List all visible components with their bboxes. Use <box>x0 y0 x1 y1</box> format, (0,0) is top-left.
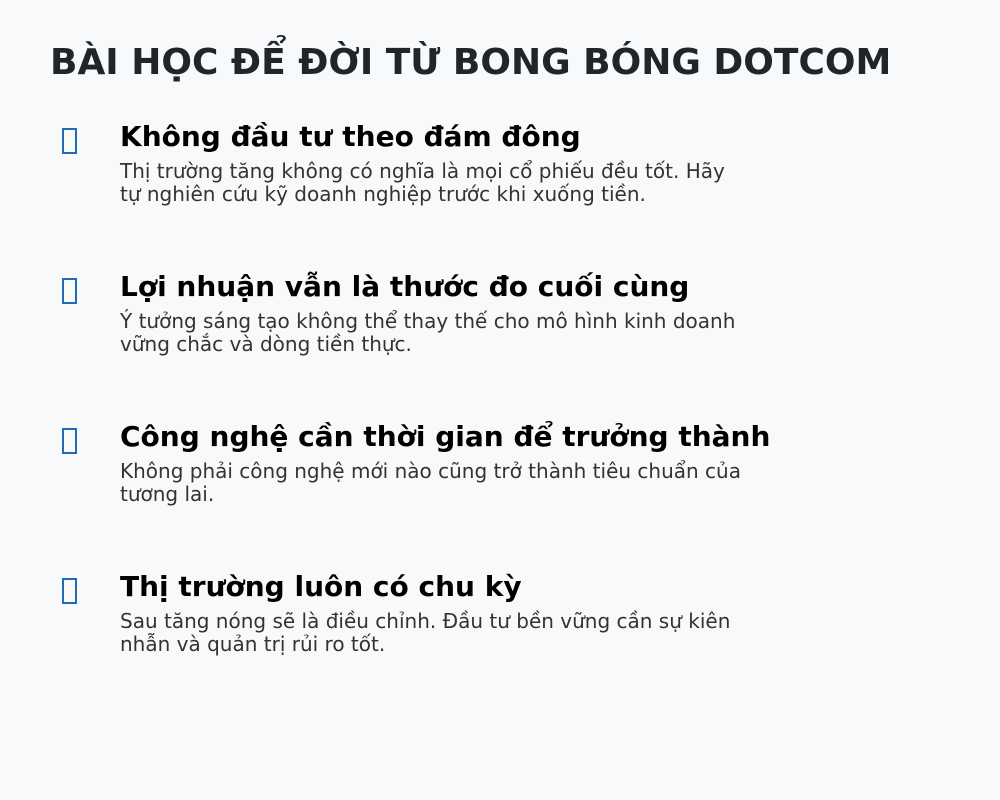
text 4: Sau tăng nóng sẽ là điều chỉnh. Đầu tư bền vững cần sự kiên nhẫn và quản trị rủi ro tốt. <box>120 609 730 656</box>
item 4 <box>62 570 730 656</box>
heading 2: Lợi nhuận vẫn là thước đo cuối cùng <box>120 270 689 303</box>
item 1 <box>62 120 725 206</box>
icon 4 <box>62 578 77 604</box>
heading 3: Công nghệ cần thời gian để trưởng thành <box>120 420 770 453</box>
text 1: Thị trường tăng không có nghĩa là mọi cổ phiếu đều tốt. Hãy tự nghiên cứu kỹ doanh nghiệp trước khi xuống tiền. <box>120 159 725 206</box>
icon 2 <box>62 278 77 304</box>
heading 4: Thị trường luôn có chu kỳ <box>120 570 522 603</box>
text 2: Ý tưởng sáng tạo không thể thay thế cho mô hình kinh doanh vững chắc và dòng tiền thực. <box>120 309 735 356</box>
icon 3 <box>62 428 77 454</box>
heading 1: Không đầu tư theo đám đông <box>120 120 581 153</box>
text 3: Không phải công nghệ mới nào cũng trở thành tiêu chuẩn của tương lai. <box>120 459 741 506</box>
icon 1 <box>62 128 77 154</box>
item 3 <box>62 420 770 506</box>
title: BÀI HỌC ĐỂ ĐỜI TỪ BONG BÓNG DOTCOM <box>50 42 891 83</box>
item 2 <box>62 270 735 356</box>
